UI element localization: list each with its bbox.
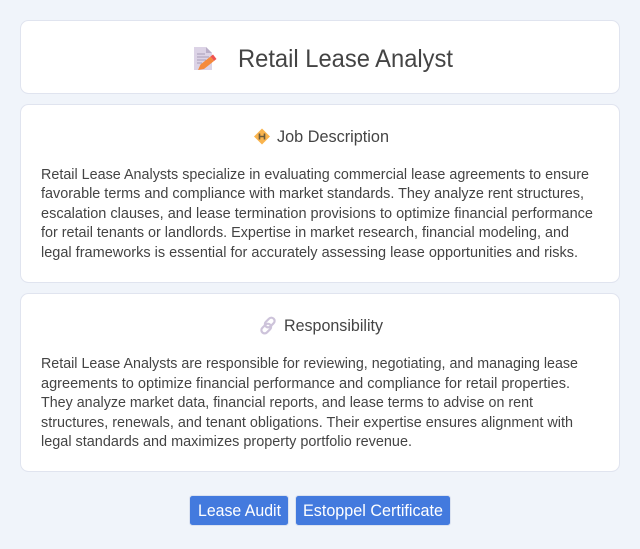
title: Retail Lease Analyst: [238, 45, 453, 73]
text block: responsibility: They analyze market data, financial reports, and lease terms to advise on rent: [41, 395, 533, 411]
text block: responsibility: structures, renewals, and tenant obligations. Their expertise ensures alignment with: [41, 415, 573, 431]
text block: job description: Retail Lease Analysts specialize in evaluating commercial lease agreements to ensure: [41, 167, 589, 183]
text block: job description: [41, 167, 593, 261]
panel: responsibility: [20, 294, 620, 472]
text block: job description: escalation clauses, and lease termination provisions to optimize financial performance: [41, 206, 593, 222]
icon: chain link: [260, 316, 276, 335]
text block: job description: favorable terms and compliance with market standards. They analyze rent structures,: [41, 186, 584, 202]
panel: job description: [20, 104, 620, 282]
text block: responsibility: Retail Lease Analysts are responsible for reviewing, negotiating, and managing lease: [41, 356, 578, 372]
tag: estoppel certificate: Estoppel Certificate: [303, 501, 443, 520]
heading: responsibility: Responsibility: [284, 316, 384, 335]
icon: orange diamond sign: [254, 128, 270, 144]
text block: responsibility: agreements to optimize financial performance and compliance for retail properties.: [41, 376, 570, 392]
text block: job description: legal frameworks is essential for accurately assessing lease opportunities and risks.: [41, 245, 578, 261]
tag: estoppel certificate: [296, 496, 450, 526]
text block: job description: for retail tenants or landlords. Expertise in market research, financial modeling, and: [41, 225, 569, 241]
icon: document with pencil: [194, 47, 216, 70]
tag: lease audit: Lease Audit: [198, 501, 281, 520]
text block: responsibility: legal standards and maximizes property portfolio revenue.: [41, 434, 412, 450]
text block: responsibility: [41, 356, 578, 450]
panel: title header: [20, 20, 620, 94]
heading: job description: Job Description: [277, 127, 389, 146]
tag: lease audit: [190, 496, 288, 526]
